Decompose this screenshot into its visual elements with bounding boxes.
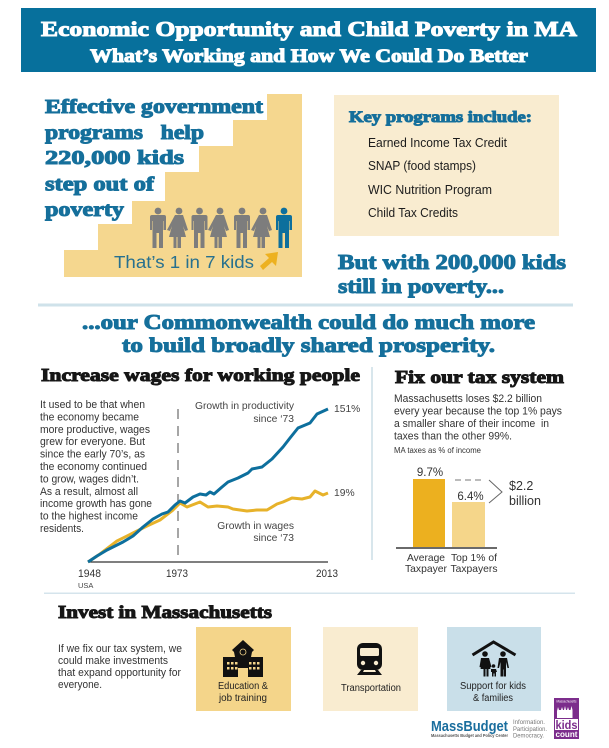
panel: education: Education & <box>218 681 268 692</box>
heading: effective government programs: 220,000 kids <box>45 147 184 169</box>
text: tax explanation: taxes than the other 99%. <box>394 430 512 442</box>
bar chart: MA taxes: billion <box>509 494 541 508</box>
logo: massbudget: Democracy. <box>513 732 544 740</box>
text: wages explanation <box>40 399 152 535</box>
line chart: productivity vs wages: since ‘73 <box>253 414 294 425</box>
text: tax explanation <box>394 393 563 442</box>
logo: kids count: count <box>556 730 578 739</box>
panel: key programs: Child Tax Credits <box>368 206 458 220</box>
logo: kids count: kids <box>556 718 578 732</box>
heading: fix our tax system: Fix our tax system <box>395 367 564 387</box>
text: wages explanation: since the early 70’s, as <box>40 449 146 461</box>
line chart: productivity vs wages: since ‘73 <box>253 533 294 544</box>
wages line <box>88 491 328 562</box>
panel: transportation <box>323 627 418 711</box>
logo: massbudget <box>431 718 547 740</box>
icon: train <box>357 643 382 675</box>
icon: gold arrow <box>260 252 278 270</box>
title banner: What’s Working and How We Could Do Better <box>90 47 528 67</box>
text: wages explanation: more productive, wages <box>40 424 151 436</box>
panel: key programs: Earned Income Tax Credit <box>368 136 507 150</box>
panel: key programs: Key programs include: <box>349 109 532 126</box>
line chart: productivity vs wages: 151% <box>334 404 360 415</box>
heading: increase wages: Increase wages for working people <box>41 365 360 385</box>
icon: school <box>223 640 263 677</box>
line chart: productivity vs wages: 19% <box>334 488 355 499</box>
text: invest explanation: that expand opportunity for <box>58 667 181 679</box>
heading: effective government programs: Effective government <box>45 96 263 118</box>
text: wages explanation: the economy continued <box>40 461 147 473</box>
line chart: productivity vs wages: 1948 <box>78 568 101 580</box>
heading: commonwealth could do more <box>82 310 535 357</box>
text: wages explanation: As a result, almost all <box>40 486 138 498</box>
text: tax explanation: a smaller share of their income in <box>394 418 549 430</box>
bar chart: MA taxes: $2.2 <box>509 479 533 493</box>
logo: kids count <box>554 698 579 739</box>
logo: massbudget: Participation. <box>513 726 547 733</box>
bar chart: MA taxes: Top 1% of <box>451 552 497 564</box>
heading: effective government programs: step out of <box>45 174 154 196</box>
logo: massbudget: Massachusetts Budget and Policy Center <box>431 733 508 738</box>
caption: that's 1 in 7 kids: That’s 1 in 7 kids <box>114 252 254 272</box>
heading: commonwealth could do more: to build broadly shared prosperity. <box>122 333 495 357</box>
text: wages explanation: residents. <box>40 523 84 535</box>
text: wages explanation: grew for everyone. But <box>40 436 145 448</box>
text: invest explanation: could make investments <box>58 655 169 667</box>
text: wages explanation: to grow, wages didn’t. <box>40 473 139 485</box>
panel: transportation: Transportation <box>341 683 401 694</box>
logo: massbudget: Information. <box>513 719 545 726</box>
line chart: productivity vs wages: 2013 <box>316 568 338 580</box>
logo: massbudget: MassBudget <box>431 718 508 735</box>
text: but with 200,000 kids: still in poverty... <box>338 274 504 298</box>
text: wages explanation: income growth has gone <box>40 498 152 510</box>
text: invest explanation: If we fix our tax system, we <box>58 643 182 655</box>
bar chart: MA taxes: Average <box>407 552 445 564</box>
panel: key programs: WIC Nutrition Program <box>368 183 492 197</box>
panel: key programs <box>334 95 559 236</box>
line chart: productivity vs wages <box>78 401 360 590</box>
text: wages explanation: the economy became <box>40 411 139 423</box>
bar chart: MA taxes: 6.4% <box>457 491 484 503</box>
heading: effective government programs: poverty <box>45 199 124 221</box>
panel: key programs: SNAP (food stamps) <box>368 159 476 173</box>
panel: staircase <box>45 94 302 277</box>
line chart: productivity vs wages: USA <box>78 581 93 590</box>
productivity line <box>88 409 328 562</box>
text: but with 200,000 kids <box>338 250 566 298</box>
label: wages: Growth in wages <box>217 521 294 532</box>
text: invest explanation: everyone. <box>58 679 102 691</box>
bar chart: MA taxes <box>394 446 541 575</box>
text: wages explanation: to the highest income <box>40 511 138 523</box>
panel: education: job training <box>218 693 267 704</box>
text: wages explanation: It used to be that when <box>40 399 145 411</box>
label: productivity: Growth in productivity <box>195 401 295 412</box>
panel: support for kids <box>447 627 541 711</box>
text: tax explanation: Massachusetts loses $2.2 billion <box>394 393 542 405</box>
panel: support for kids: & families <box>473 693 513 704</box>
title banner: Economic Opportunity and Child Poverty in MA <box>41 17 578 41</box>
bar chart: MA taxes: 9.7% <box>417 467 443 479</box>
line chart: productivity vs wages: 1973 <box>166 568 188 580</box>
text: tax explanation: every year because the top 1% pays <box>394 406 563 418</box>
panel: support for kids: Support for kids <box>460 681 526 692</box>
icon: family under roof <box>472 642 516 676</box>
panel: education <box>196 627 291 711</box>
heading: effective government programs: programs help <box>45 122 204 144</box>
heading: effective government programs <box>45 96 263 221</box>
logo: kids count: Massachusetts <box>556 700 577 704</box>
heading: invest in massachusetts: Invest in Massachusetts <box>58 602 272 622</box>
text: invest explanation <box>58 643 182 691</box>
heading: commonwealth could do more: ...our Commonwealth could do much more <box>82 310 535 334</box>
bar chart: MA taxes: Taxpayer <box>405 563 447 575</box>
icon: row of seven people <box>150 208 292 248</box>
bar chart: MA taxes: MA taxes as % of income <box>394 446 482 455</box>
text: but with 200,000 kids: But with 200,000 kids <box>338 250 566 274</box>
title banner <box>21 8 596 72</box>
bar chart: MA taxes: Taxpayers <box>450 563 498 575</box>
